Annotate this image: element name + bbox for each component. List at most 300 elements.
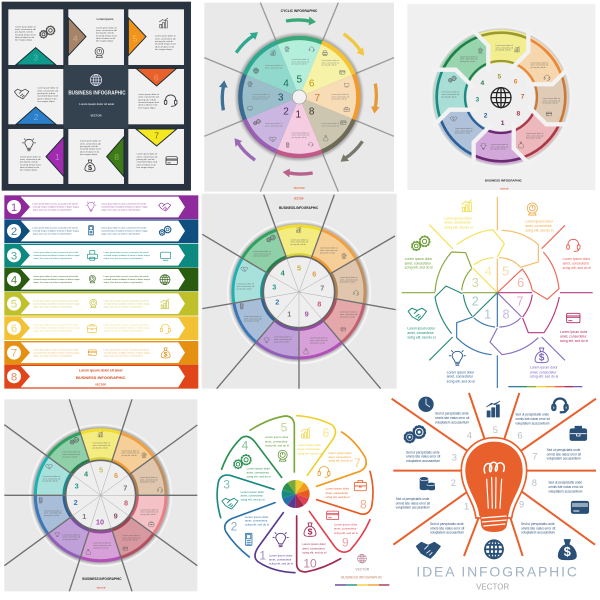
ring text: amet, consectetur adi xyxy=(496,46,514,49)
tile 7: amet, consectetur adi xyxy=(137,155,158,158)
ring text: amet, consectetur adi xyxy=(340,278,358,281)
pinwheel text: Lorem ipsum dolor xyxy=(530,366,558,370)
row 6: aliqua. Duis aute irure dolor in reprehenderit xyxy=(104,330,143,333)
ring numbers: 4 xyxy=(281,268,286,277)
tile 5 xyxy=(128,9,184,65)
petal text: Lorem ipsum dolor xyxy=(326,487,349,491)
bulb text blocks: voluptatem accusantium xyxy=(521,531,555,535)
ring text: Lorem ipsum dolor sit xyxy=(340,311,358,314)
tile 6 xyxy=(128,68,184,124)
bulb text blocks: omnis iste natus error sit xyxy=(515,417,550,421)
tile 8 xyxy=(68,129,124,184)
tile 1: amet, consectetur adi xyxy=(20,158,41,161)
ring text: Lorem ipsum dolor sit xyxy=(244,315,262,318)
petal numbers xyxy=(223,420,367,570)
pinwheel text: Lorem ipsum dolor xyxy=(444,216,473,220)
ring text xyxy=(237,238,358,344)
row 2: eiusmod tempor incididunt ut labore et dolore magna xyxy=(101,230,149,233)
petal numbers: 1 xyxy=(259,549,266,563)
bulb text blocks xyxy=(396,412,583,535)
row 1: 1 xyxy=(11,202,17,214)
wheel text: piscing elit, sed do xyxy=(292,63,307,66)
title: BUSINESS-INFOGRAPHIC xyxy=(279,206,319,210)
tile 5: 5 xyxy=(133,33,138,43)
ring text: Lorem ipsum dolor sit xyxy=(442,91,460,94)
petal text: scing elit, sed do ei xyxy=(241,498,265,502)
petal text: amet, consectetur xyxy=(302,546,325,550)
tile 8: Lorem ipsum dolor sit xyxy=(80,140,101,143)
pinwheel text: Lorem ipsum dolor xyxy=(405,257,433,261)
ring text: piscing elit, sed do xyxy=(340,281,355,284)
petal text: scing elit, sed do ei xyxy=(298,451,322,455)
ring text: Lorem ipsum dolor sit xyxy=(93,442,111,445)
pinwheel text: scing elit, sed do ei xyxy=(530,375,559,379)
ring fills xyxy=(29,424,172,567)
row 3 xyxy=(4,244,198,267)
pinwheel numbers: 5 xyxy=(502,264,509,278)
row 5: eiusmod tempor incididunt ut labore et dolore magna xyxy=(104,302,151,305)
ring text: amet, consectetur adi xyxy=(320,249,338,252)
ring text: amet, consectetur adi xyxy=(93,544,111,547)
vector label: VECTOR xyxy=(294,198,304,200)
wheel numbers: 6 xyxy=(309,78,315,89)
pinwheel text: Lorem ipsum dolor xyxy=(563,257,591,261)
ring text: Lorem ipsum dolor sit xyxy=(253,250,271,253)
petal icons xyxy=(222,427,366,547)
ring text: piscing elit, sed do xyxy=(274,340,289,343)
spokes xyxy=(4,399,197,591)
tile 1: eiusmod tempor incid xyxy=(20,163,41,166)
tile 5: amet, consectetur adi xyxy=(155,37,176,40)
ring text: piscing elit, sed do xyxy=(442,95,457,98)
row 1: eiusmod tempor incididunt ut labore et dolore magna xyxy=(33,206,80,209)
tile 2: 2 xyxy=(34,112,39,122)
panel: swirl ring infographic xyxy=(408,4,596,190)
ring text: amet, consectetur adi xyxy=(253,252,271,255)
row 4 xyxy=(4,268,198,291)
tile 6: 6 xyxy=(154,72,159,82)
petal text: amet, consectetur xyxy=(328,455,351,459)
outline strokes xyxy=(402,197,593,388)
tile 8: eiusmod tempor incid xyxy=(80,148,101,151)
tile 3: piscing elit, sed do xyxy=(15,31,34,34)
row 6: eiusmod tempor incididunt ut labore et dolore magna xyxy=(104,327,151,330)
row 3: Lorem ipsum dolor sit amet, consectetur elit sed do xyxy=(33,251,79,254)
tile 8: idunt ut labore et do xyxy=(80,150,100,153)
title: IDEA INFOGRAPHIC xyxy=(416,563,577,579)
row 7 xyxy=(4,341,198,365)
title: BUSINESS INFOGRAPHIC xyxy=(341,575,383,579)
ring text: piscing elit, sed do xyxy=(340,315,355,318)
row 2: 2 xyxy=(11,226,17,238)
tile 4 xyxy=(68,9,124,65)
ring text: Lorem ipsum dolor sit xyxy=(123,534,141,537)
ring text: amet, consectetur adi xyxy=(310,339,328,342)
ring bands xyxy=(206,199,392,385)
ring numbers: 3 xyxy=(272,283,276,292)
wheel text: piscing elit, sed do xyxy=(322,64,337,67)
ring numbers: 6 xyxy=(114,471,118,480)
arrows around wheel xyxy=(219,17,380,177)
wheel text: Lorem ipsum dolor sit xyxy=(252,93,270,96)
ring text: piscing elit, sed do xyxy=(140,481,155,484)
ring text xyxy=(442,44,561,151)
row 1: aliqua. Duis aute irure dolor in reprehenderit xyxy=(101,209,140,212)
tile 2: idunt ut labore et do xyxy=(37,97,57,100)
ring numbers: 3 xyxy=(75,481,79,490)
petal numbers: 3 xyxy=(223,478,230,492)
row 8: BUSINESS INFOGRAPHIC xyxy=(76,375,125,380)
ring text: piscing elit, sed do xyxy=(123,539,138,542)
ring numbers xyxy=(475,73,525,127)
row 6: Lorem ipsum dolor sit amet, consectetur elit sed do xyxy=(104,324,149,327)
row 1: Lorem ipsum dolor sit amet, consectetur elit sed do xyxy=(33,203,78,206)
row 6: Lorem ipsum dolor sit amet, consectetur elit sed do xyxy=(33,324,79,327)
ring text: Lorem ipsum dolor sit xyxy=(62,451,80,454)
ring text: Lorem ipsum dolor sit xyxy=(526,132,544,135)
ring text: Lorem ipsum dolor sit xyxy=(531,61,549,64)
ring text: piscing elit, sed do xyxy=(63,538,78,541)
tile 8: lore magna aliqua xyxy=(80,153,98,156)
petal text: scing elit, sed do ei xyxy=(269,561,293,565)
ring text: amet, consectetur adi xyxy=(43,477,61,480)
tile 5: Lorem ipsum dolor sit xyxy=(155,35,176,38)
bulb text blocks: voluptatem accusantium xyxy=(435,420,469,424)
ring text: piscing elit, sed do xyxy=(526,137,541,140)
tile 4: amet, consectetur adi xyxy=(96,29,117,32)
step numbers: 1 xyxy=(464,501,469,511)
ring segment fills xyxy=(434,30,568,164)
wheel text: amet, consectetur adi xyxy=(265,124,283,127)
row 2: aliqua. Duis aute irure dolor in reprehenderit xyxy=(33,233,72,236)
tile 1: Lorem ipsum dolor sit xyxy=(20,155,41,158)
row 3: aliqua. Duis aute irure dolor in reprehenderit xyxy=(33,257,72,260)
rainbow bar xyxy=(335,584,389,586)
row 5: 5 xyxy=(11,299,17,311)
row 1: eiusmod tempor incididunt ut labore et dolore magna xyxy=(101,206,149,209)
petal text: Lorem ipsum dolor xyxy=(241,490,264,494)
row 5: Lorem ipsum dolor sit amet, consectetur elit sed do xyxy=(33,299,79,302)
ring text: piscing elit, sed do xyxy=(291,243,306,246)
ring text: piscing elit, sed do xyxy=(253,255,268,258)
ring text: Lorem ipsum dolor sit xyxy=(63,533,81,536)
bulb text blocks: omnis iste natus error sit xyxy=(547,452,581,456)
tile 6: Lorem ipsum dolor sit xyxy=(138,93,159,96)
ring text: amet, consectetur adi xyxy=(44,512,62,515)
bulb text blocks: Sed ut perspiciatis unde xyxy=(396,497,430,501)
panel: ten segment ring xyxy=(4,399,197,591)
ring numbers: 8 xyxy=(516,111,520,118)
row 7: 7 xyxy=(11,348,17,360)
petal text: Lorem ipsum dolor xyxy=(245,515,268,519)
ring icons xyxy=(448,46,552,149)
ring numbers: 1 xyxy=(501,120,505,127)
tile 3: amet, consectetur adi xyxy=(15,28,36,31)
ring segment bands xyxy=(435,31,567,163)
row 1: aliqua. Duis aute irure dolor in reprehenderit xyxy=(33,209,72,212)
petal text: scing elit, sed do ei xyxy=(302,550,327,554)
row 6: 6 xyxy=(11,323,17,335)
row 4: aliqua. Duis aute irure dolor in reprehenderit xyxy=(104,281,143,284)
petal text: scing elit, sed do ei xyxy=(245,523,269,527)
petal text: amet, consectetur xyxy=(298,447,320,451)
ring numbers: 2 xyxy=(484,112,488,119)
ring text: amet, consectetur adi xyxy=(244,317,262,320)
center title: Lorem ipsum dolor sit amet xyxy=(79,102,114,106)
petal text: Lorem ipsum dolor xyxy=(265,435,288,439)
panel: idea light bulb infographic xyxy=(392,393,596,591)
row 4: eiusmod tempor incididunt ut labore et dolore magna xyxy=(104,278,151,281)
row 4: Lorem ipsum dolor sit amet, consectetur elit sed do xyxy=(33,275,79,278)
ring text: Lorem ipsum dolor sit xyxy=(140,476,158,479)
ring text: amet, consectetur adi xyxy=(274,338,292,341)
ring text: piscing elit, sed do xyxy=(43,480,58,483)
ring text: amet, consectetur adi xyxy=(543,99,561,102)
petal text: amet, consectetur xyxy=(245,519,268,523)
tile 4: Lorem Ipsum xyxy=(97,17,114,21)
tile 2: Lorem ipsum dolor sit xyxy=(37,87,58,90)
pinwheel text: Lorem ipsum dolor xyxy=(447,370,475,374)
ring numbers: 7 xyxy=(123,484,127,493)
tile 8: 8 xyxy=(114,152,119,162)
step numbers: 3 xyxy=(452,452,457,462)
ring text xyxy=(43,442,159,549)
petal numbers: 10 xyxy=(303,556,317,570)
ring text: amet, consectetur adi xyxy=(340,313,358,316)
ring numbers: 5 xyxy=(99,465,103,474)
row 6: eiusmod tempor incididunt ut labore et dolore magna xyxy=(33,327,81,330)
bulb text blocks: omnis iste natus error sit xyxy=(548,485,583,489)
center title: BUSINESS INFOGRAPHIC xyxy=(68,90,126,96)
ray lines xyxy=(392,393,596,556)
tile 3: Lorem ipsum dolor sit xyxy=(15,25,36,28)
row 8 xyxy=(4,365,198,389)
ring numbers: 2 xyxy=(74,498,78,507)
row 8: 8 xyxy=(11,371,17,383)
petal text: amet, consectetur xyxy=(334,527,357,531)
wheel icons xyxy=(248,46,349,147)
ring numbers: 9 xyxy=(114,512,118,521)
ring numbers xyxy=(272,264,324,318)
petal numbers: 9 xyxy=(342,535,349,549)
ring text: amet, consectetur adi xyxy=(93,444,111,447)
tile 6: eiusmod tempor incid xyxy=(138,101,160,104)
bulb text blocks: voluptatem accusantium xyxy=(406,459,440,463)
bulb text blocks: omnis iste natus error sit xyxy=(521,526,555,530)
tile 1: 1 xyxy=(55,152,60,162)
row 2 xyxy=(4,219,198,243)
ring text: piscing elit, sed do xyxy=(310,341,325,344)
wheel text: amet, consectetur adi xyxy=(292,60,310,63)
petal numbers: 8 xyxy=(360,497,367,511)
wheel text: piscing elit, sed do xyxy=(252,98,267,101)
ring numbers: 5 xyxy=(497,73,501,80)
ring fills xyxy=(226,219,372,365)
tile 3: eiusmod tempor incid xyxy=(15,33,36,36)
ring numbers: 4 xyxy=(84,469,89,478)
step numbers: 7 xyxy=(532,451,538,461)
bulb text blocks: Sed ut perspiciatis unde xyxy=(547,448,581,452)
tile 3 xyxy=(8,9,63,65)
inner spokes xyxy=(264,258,334,328)
panel: square tiles infographic xyxy=(2,2,191,191)
row 7: $ xyxy=(164,352,168,359)
row 2: eiusmod tempor incididunt ut labore et dolore magna xyxy=(33,230,80,233)
bulb text blocks: Sed ut perspiciatis unde xyxy=(430,522,464,526)
row 7: Lorem ipsum dolor sit amet, consectetur elit sed do xyxy=(33,348,79,351)
ring text: piscing elit, sed do xyxy=(122,454,137,457)
tile 8: piscing elit, sed do xyxy=(80,145,99,148)
ring text: Lorem ipsum dolor sit xyxy=(122,449,140,452)
wheel text: amet, consectetur adi xyxy=(252,95,270,98)
wheel numbers: 8 xyxy=(309,106,315,117)
tile 4: lore magna aliqua xyxy=(96,40,114,43)
ring text: Lorem ipsum dolor sit xyxy=(320,247,338,250)
ring text: amet, consectetur adi xyxy=(526,134,544,137)
petal text: Lorem ipsum dolor xyxy=(298,443,321,447)
ring text: amet, consectetur adi xyxy=(531,64,549,67)
ring icons xyxy=(39,431,163,555)
icon: globe xyxy=(358,554,366,563)
bulb text blocks: voluptatem accusantium xyxy=(430,531,464,535)
tile 6: idunt ut labore et do xyxy=(138,104,158,107)
inner disc xyxy=(66,460,136,530)
ring text: Lorem ipsum dolor sit xyxy=(340,276,358,279)
rainbow bar xyxy=(508,386,582,387)
ring bands xyxy=(9,404,192,587)
ring text: Lorem ipsum dolor sit xyxy=(44,509,62,512)
petal text: Lorem ipsum dolor xyxy=(302,542,326,546)
pinwheel text: scing elit, sed do ei xyxy=(405,266,433,270)
row 3: 3 xyxy=(11,250,17,262)
tile 2: piscing elit, sed do xyxy=(37,92,56,95)
wheel text: Lorem ipsum dolor sit xyxy=(292,58,310,61)
pinwheel text: Lorem ipsum dolor xyxy=(560,330,588,334)
row 1 xyxy=(4,195,198,219)
inner spokes xyxy=(66,462,136,529)
tile 4: 4 xyxy=(73,33,78,43)
pinwheel text: amet, consectetur xyxy=(444,221,472,225)
tile 7: eiusmod tempor incid xyxy=(137,161,158,164)
tile 1 xyxy=(8,129,64,184)
icon: globe xyxy=(491,88,511,108)
tile 2: lore magna aliqua xyxy=(37,100,55,103)
row 2: Lorem ipsum dolor sit amet, consectetur elit sed do xyxy=(33,227,78,230)
pinwheel numbers: 8 xyxy=(502,308,510,322)
ring text: piscing elit, sed do xyxy=(62,455,77,458)
row 3: eiusmod tempor incididunt ut labore et dolore magna xyxy=(104,254,151,257)
wheel numbers xyxy=(278,75,321,121)
tile 5: idunt ut labore et do xyxy=(155,45,175,48)
wheel text: piscing elit, sed do xyxy=(332,98,347,101)
pinwheel numbers: 4 xyxy=(485,264,492,278)
ring text: amet, consectetur adi xyxy=(291,241,309,244)
petal text: Lorem ipsum dolor xyxy=(328,451,352,455)
ring text: piscing elit, sed do xyxy=(44,514,59,517)
vector label: VECTOR xyxy=(293,186,305,190)
tile 7: piscing elit, sed do xyxy=(137,158,155,161)
ring numbers: 3 xyxy=(475,96,479,103)
wheel outer ring xyxy=(222,20,376,174)
row 7: Lorem ipsum dolor sit amet, consectetur elit sed do xyxy=(104,348,149,351)
petal outlines xyxy=(217,416,373,573)
tile 6: piscing elit, sed do xyxy=(138,98,157,101)
pinwheel text: scing elit, sed do ei xyxy=(447,379,475,383)
petal text: scing elit, sed do ei xyxy=(247,474,271,478)
bulb text blocks: voluptatem accusantium xyxy=(396,506,430,510)
ring text: amet, consectetur adi xyxy=(491,145,509,148)
navy icons: $ xyxy=(564,545,571,559)
pinwheel text: amet, consectetur xyxy=(530,370,557,374)
pinwheel numbers: 6 xyxy=(517,276,524,290)
ring numbers: 6 xyxy=(514,78,518,85)
wheel text: amet, consectetur adi xyxy=(322,124,340,127)
bulb text blocks: Sed ut perspiciatis unde xyxy=(515,413,549,417)
white separators xyxy=(432,28,570,166)
ring text: piscing elit, sed do xyxy=(320,251,335,254)
wheel text: Lorem ipsum dolor sit xyxy=(292,131,310,134)
ring text: amet, consectetur adi xyxy=(455,129,473,132)
ring text: piscing elit, sed do xyxy=(237,287,252,290)
petal numbers: 5 xyxy=(281,420,288,434)
bulb text blocks: omnis iste natus error sit xyxy=(406,455,441,459)
petal icons: $ xyxy=(308,526,313,536)
ring text: amet, consectetur adi xyxy=(123,536,141,539)
row 4: aliqua. Duis aute irure dolor in reprehenderit xyxy=(33,281,72,284)
pinwheel numbers: 1 xyxy=(484,308,491,322)
tile 4: Lorem ipsum dolor sit xyxy=(96,26,117,29)
navy icons xyxy=(404,397,589,560)
row 3: Lorem ipsum dolor sit amet, consectetur elit sed do xyxy=(104,251,149,254)
pinwheel icons xyxy=(408,200,580,365)
tile 2: amet, consectetur adi xyxy=(37,89,58,92)
ring text: Lorem ipsum dolor sit xyxy=(543,97,561,100)
wheel text: amet, consectetur adi xyxy=(332,95,350,98)
row 7: aliqua. Duis aute irure dolor in reprehenderit xyxy=(33,354,72,357)
petal text xyxy=(241,435,358,565)
tile 2: eiusmod tempor incid xyxy=(37,95,59,98)
ring text: amet, consectetur adi xyxy=(237,285,255,288)
row 3: eiusmod tempor incididunt ut labore et dolore magna xyxy=(33,254,81,257)
pinwheel text: scing elit, sed do ei xyxy=(525,228,554,232)
ring numbers: 4 xyxy=(480,80,484,87)
step numbers: 6 xyxy=(517,431,523,441)
ring text: Lorem ipsum dolor sit xyxy=(43,475,61,478)
step numbers: 4 xyxy=(467,431,472,441)
bulb text blocks: omnis iste natus error sit xyxy=(396,501,430,505)
tile 6: amet, consectetur adi xyxy=(138,96,159,99)
wheel text: amet, consectetur adi xyxy=(322,61,340,64)
row 8: Lorem ipsum dolor sit amet xyxy=(79,368,123,372)
row 7: eiusmod tempor incididunt ut labore et dolore magna xyxy=(104,351,151,354)
row 5: aliqua. Duis aute irure dolor in reprehenderit xyxy=(33,305,72,308)
petal text: Lorem ipsum dolor xyxy=(247,466,270,470)
pinwheel icons: $ xyxy=(539,352,545,363)
central hub xyxy=(467,63,535,131)
row 6 xyxy=(4,316,198,340)
petal text: Lorem ipsum dolor xyxy=(334,522,357,526)
pinwheel text: amet, consectetur xyxy=(447,375,474,379)
petal text: scing elit, sed do ei xyxy=(326,495,350,499)
petal numbers: 6 xyxy=(323,426,330,440)
title: BUSINESS INFOGRAPHIC xyxy=(82,577,122,581)
tile 7: idunt ut labore et do xyxy=(137,163,157,166)
panel: rounded petal wheel xyxy=(217,416,389,586)
petal text: amet, consectetur xyxy=(247,470,269,474)
pinwheel text: amet, consectetur xyxy=(405,261,432,265)
pinwheel numbers: 2 xyxy=(472,295,479,309)
tile 6: lore magna aliqua xyxy=(138,106,156,109)
